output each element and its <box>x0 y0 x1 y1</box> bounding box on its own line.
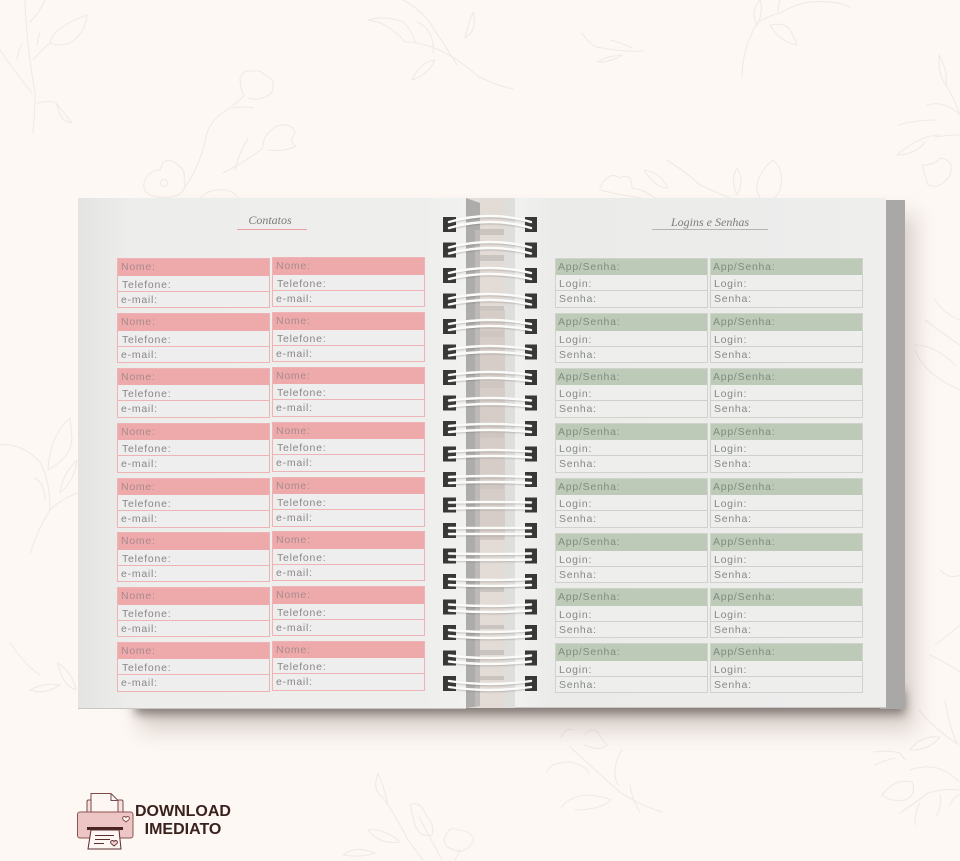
contact card row 6 left <box>117 532 270 582</box>
login card row 8 right <box>710 643 863 693</box>
login card row 3 left: App/Senha: <box>558 371 620 383</box>
login card row 1 right: Senha: <box>714 293 752 305</box>
login card row 2 left: App/Senha: <box>558 316 620 328</box>
login card row 7 right <box>710 588 863 638</box>
login card row 7 left: App/Senha: <box>558 591 620 603</box>
contact card row 4 left: e-mail: <box>121 458 158 470</box>
login card row 1 right: App/Senha: <box>713 260 775 272</box>
login card row 6 right: Senha: <box>714 568 752 580</box>
contact card row 1 left: e-mail: <box>121 294 158 306</box>
login card row 6 right <box>710 533 863 583</box>
contact card row 4 right: e-mail: <box>276 457 313 469</box>
login card row 5 right: Senha: <box>714 513 752 525</box>
contact card row 5 right: Nome: <box>276 480 311 492</box>
contact card row 7 left <box>117 587 270 637</box>
contact card row 5 left: e-mail: <box>121 513 158 525</box>
contact card row 7 right: Nome: <box>276 589 311 601</box>
contact card row 8 right <box>272 641 425 691</box>
label: download imediato: IMEDIATO <box>145 821 221 838</box>
login card row 7 left: Senha: <box>559 624 597 636</box>
contact card row 8 left: Nome: <box>121 645 156 657</box>
login card row 8 right: Login: <box>714 664 747 676</box>
contact card row 8 left: Telefone: <box>122 662 171 674</box>
contact card row 3 right: Telefone: <box>277 387 326 399</box>
login card row 2 right: Login: <box>714 334 747 346</box>
contact card row 5 right: Telefone: <box>277 497 326 509</box>
login card row 4 left: App/Senha: <box>558 426 620 438</box>
icon: printer <box>77 793 134 850</box>
login card row 5 right: App/Senha: <box>713 481 775 493</box>
contact card row 7 left: Nome: <box>121 590 156 602</box>
login card row 4 left: Login: <box>559 443 592 455</box>
back cover edge <box>880 200 905 709</box>
login card row 4 right <box>710 423 863 473</box>
login card row 5 left: Login: <box>559 498 592 510</box>
contact card row 3 left <box>117 368 270 418</box>
login card row 8 left <box>555 643 708 693</box>
login card row 2 left: Senha: <box>559 348 597 360</box>
contact card row 8 right: e-mail: <box>276 676 313 688</box>
login card row 8 left: Login: <box>559 664 592 676</box>
contact card row 1 right: Nome: <box>276 260 311 272</box>
login card row 6 right: Login: <box>714 554 747 566</box>
contact card row 3 right: e-mail: <box>276 402 313 414</box>
contact card row 6 right: Nome: <box>276 534 311 546</box>
login card row 1 left: Senha: <box>559 293 597 305</box>
contact card row 2 right: Nome: <box>276 315 311 327</box>
contact card row 1 left: Nome: <box>121 261 156 273</box>
contact card row 4 right: Telefone: <box>277 442 326 454</box>
login card row 8 right: Senha: <box>714 678 752 690</box>
contact card row 4 left <box>117 423 270 473</box>
login card row 6 left <box>555 533 708 583</box>
login card row 3 right: Login: <box>714 388 747 400</box>
contact card row 2 right: e-mail: <box>276 348 313 360</box>
login card row 5 right <box>710 478 863 528</box>
login card row 1 right: Login: <box>714 278 747 290</box>
contact card row 7 right <box>272 586 425 636</box>
login card row 7 right: Login: <box>714 608 747 620</box>
login card row 5 left: Senha: <box>559 513 597 525</box>
login card row 8 left: Senha: <box>559 678 597 690</box>
contact card row 3 right: Nome: <box>276 370 311 382</box>
login card row 4 right: App/Senha: <box>713 426 775 438</box>
contact card row 8 right: Nome: <box>276 644 311 656</box>
contact card row 8 right: Telefone: <box>277 661 326 673</box>
contact card row 1 right: Telefone: <box>277 278 326 290</box>
contact card row 3 right <box>272 367 425 417</box>
contact card row 2 right <box>272 312 425 362</box>
login card row 2 right <box>710 313 863 363</box>
soft wide shadow around notebook <box>140 215 915 730</box>
login card row 7 left <box>555 588 708 638</box>
contact card row 4 left: Nome: <box>121 426 156 438</box>
contact card row 7 right: Telefone: <box>277 607 326 619</box>
login card row 2 left: Login: <box>559 334 592 346</box>
login card row 7 left: Login: <box>559 608 592 620</box>
login card row 1 left: App/Senha: <box>558 260 620 272</box>
page title: Logins e Senhas: Logins e Senhas <box>671 215 749 229</box>
login card row 8 left: App/Senha: <box>558 646 620 658</box>
login card row 1 left <box>555 258 708 308</box>
login card row 8 right: App/Senha: <box>713 646 775 658</box>
login card row 5 left <box>555 478 708 528</box>
login card row 3 left: Login: <box>559 388 592 400</box>
login card row 6 left: Login: <box>559 554 592 566</box>
contact card row 1 right <box>272 257 425 307</box>
contact card row 2 left: Nome: <box>121 316 156 328</box>
login card row 2 left <box>555 313 708 363</box>
contact card row 2 left: e-mail: <box>121 348 158 360</box>
login card row 4 left: Senha: <box>559 458 597 470</box>
spiral binding <box>443 214 537 693</box>
contact card row 2 left <box>117 313 270 363</box>
login card row 7 right: App/Senha: <box>713 591 775 603</box>
login card row 3 right <box>710 368 863 418</box>
login card row 6 left: Senha: <box>559 568 597 580</box>
contact card row 6 right: e-mail: <box>276 567 313 579</box>
contact card row 1 left: Telefone: <box>122 279 171 291</box>
contact card row 7 left: e-mail: <box>121 623 158 635</box>
tight shadow below notebook <box>135 690 905 714</box>
left page: Contatos <box>78 198 466 709</box>
contact card row 4 right <box>272 422 425 472</box>
page title: Contatos: Contatos <box>248 213 292 227</box>
notebook spine and inner pages <box>466 198 515 708</box>
label: download imediato: DOWNLOAD <box>135 802 231 820</box>
contact card row 5 left: Telefone: <box>122 498 171 510</box>
title underline: Contatos <box>237 229 307 230</box>
contact card row 4 right: Nome: <box>276 425 311 437</box>
login card row 4 right: Login: <box>714 443 747 455</box>
contact card row 1 left <box>117 258 270 308</box>
login card row 6 right: App/Senha: <box>713 536 775 548</box>
contact card row 5 left <box>117 478 270 528</box>
login card row 1 left: Login: <box>559 278 592 290</box>
contact card row 6 right: Telefone: <box>277 552 326 564</box>
contact card row 4 left: Telefone: <box>122 443 171 455</box>
login card row 2 right: App/Senha: <box>713 316 775 328</box>
login card row 1 right <box>710 258 863 308</box>
login card row 4 left <box>555 423 708 473</box>
contact card row 3 left: Nome: <box>121 371 156 383</box>
contact card row 8 left: e-mail: <box>121 677 158 689</box>
contact card row 7 left: Telefone: <box>122 608 171 620</box>
login card row 3 right: App/Senha: <box>713 371 775 383</box>
login card row 3 right: Senha: <box>714 403 752 415</box>
login card row 5 left: App/Senha: <box>558 481 620 493</box>
title underline: Logins e Senhas <box>652 229 768 230</box>
login card row 6 left: App/Senha: <box>558 536 620 548</box>
login card row 3 left: Senha: <box>559 403 597 415</box>
contact card row 2 right: Telefone: <box>277 332 326 344</box>
contact card row 7 right: e-mail: <box>276 622 313 634</box>
label: download imediato <box>135 802 231 838</box>
contact card row 3 left: e-mail: <box>121 403 158 415</box>
contact card row 8 left <box>117 642 270 692</box>
login card row 2 right: Senha: <box>714 348 752 360</box>
contact card row 5 right: e-mail: <box>276 512 313 524</box>
contact card row 6 left: Nome: <box>121 535 156 547</box>
contact card row 6 left: e-mail: <box>121 568 158 580</box>
contact card row 6 left: Telefone: <box>122 553 171 565</box>
contact card row 2 left: Telefone: <box>122 334 171 346</box>
right page: Logins e Senhas <box>515 198 886 708</box>
login card row 4 right: Senha: <box>714 458 752 470</box>
login card row 7 right: Senha: <box>714 624 752 636</box>
contact card row 5 left: Nome: <box>121 480 156 492</box>
contact card row 3 left: Telefone: <box>122 388 171 400</box>
contact card row 5 right <box>272 476 425 526</box>
contact card row 1 right: e-mail: <box>276 293 313 305</box>
contact card row 6 right <box>272 531 425 581</box>
login card row 5 right: Login: <box>714 498 747 510</box>
login card row 3 left <box>555 368 708 418</box>
